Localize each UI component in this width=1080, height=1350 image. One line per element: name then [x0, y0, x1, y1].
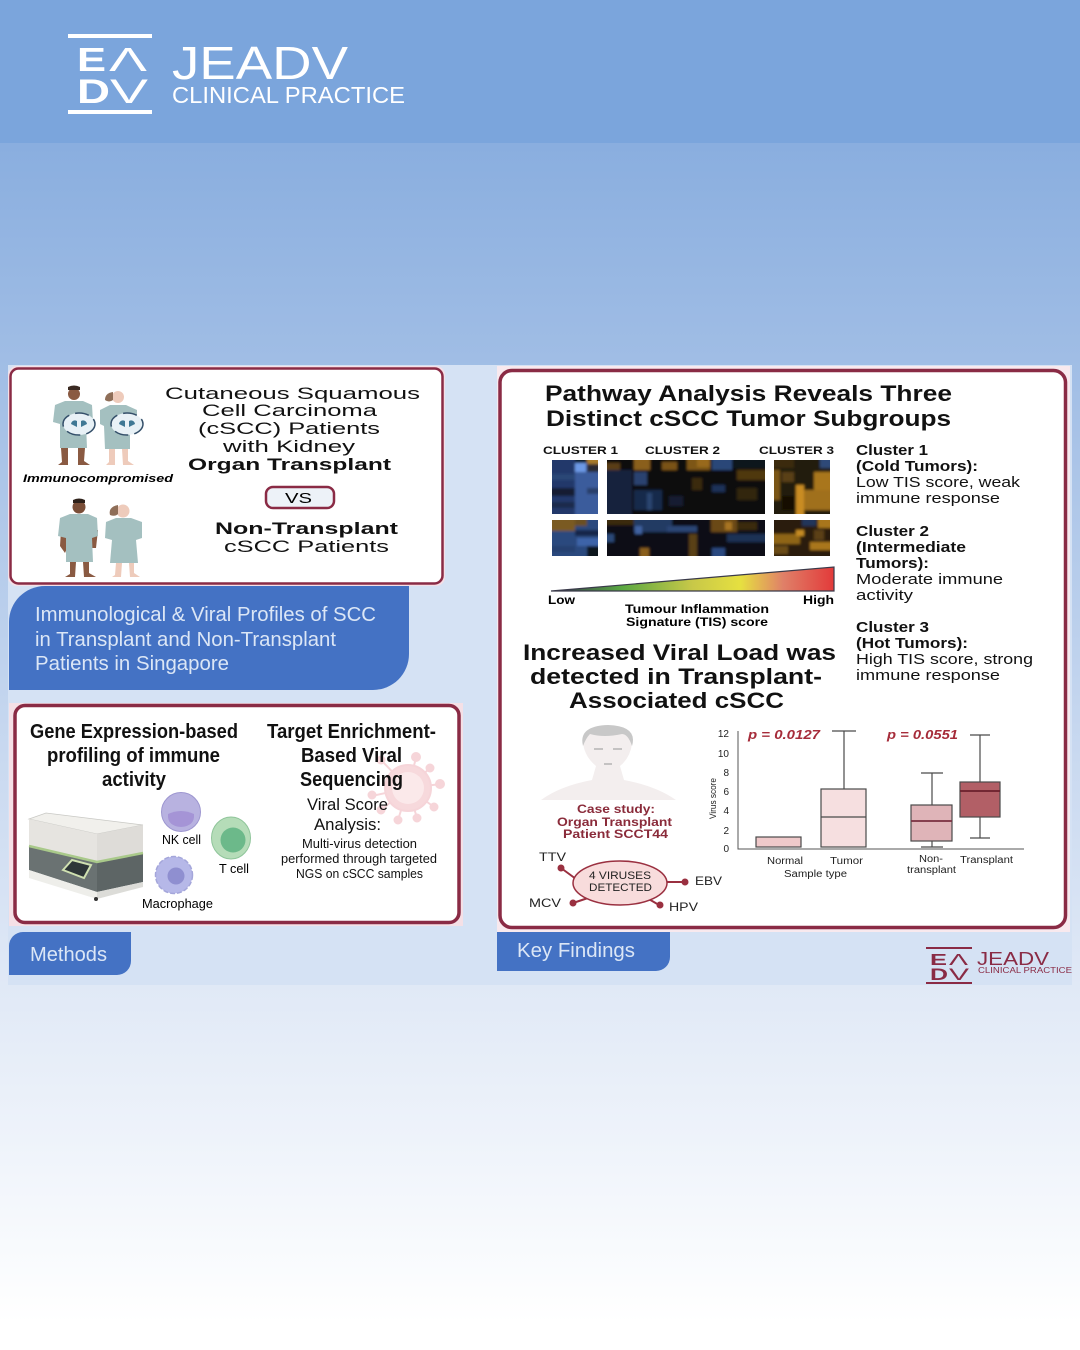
- logo: JEADV Clinical Practice: Λ: [109, 41, 147, 78]
- title banner: in Transplant and Non-Transplant: [35, 628, 336, 651]
- box plot: virus score: Tumor: [830, 856, 864, 867]
- heading: gene expression profiling: profiling of immune: [47, 745, 220, 767]
- icon: T cell: T cell: [219, 862, 249, 876]
- icon: sequencing machine: [29, 813, 143, 901]
- diagram: four viruses detected: TTV: [539, 850, 566, 864]
- icon: NK cell: [162, 792, 201, 847]
- text: cluster 2: Cluster 2: [856, 524, 929, 540]
- text: cluster 2: Tumors):: [856, 556, 929, 572]
- heading: viral sequencing: Sequencing: [300, 769, 403, 791]
- logo: JEADV Clinical Practice: CLINICAL PRACTICE: [172, 82, 405, 108]
- icon: non-transplant patients: [58, 498, 142, 577]
- text: viral score analysis: Viral Score: [307, 795, 388, 814]
- badge: vs: VS: [285, 490, 312, 507]
- text: non-transplant group: [215, 519, 398, 556]
- TIS gradient wedge: Tumour Inflammation: [625, 604, 769, 616]
- TIS gradient wedge: [548, 567, 834, 629]
- icon: macrophage: Macrophage: [142, 897, 213, 911]
- box plot: virus score: 8: [723, 768, 729, 779]
- box plot: virus score: [708, 728, 1024, 880]
- heatmap: [549, 457, 833, 559]
- TIS gradient wedge: Signature (TIS) score: [626, 617, 768, 629]
- box plot: virus score: Sample type: [784, 869, 847, 880]
- text: transplant group: Cell Carcinoma: [202, 401, 378, 420]
- logo: small JEADV: Λ: [949, 952, 969, 969]
- heatmap labels: CLUSTER 1: [543, 445, 618, 457]
- box plot: virus score: transplant: [907, 865, 956, 876]
- text: transplant group: Organ Transplant: [188, 455, 391, 474]
- logo: JEADV Clinical Practice: V: [110, 73, 149, 111]
- panel: methods: [9, 703, 463, 926]
- text: viral score analysis: Multi-virus detection: [302, 836, 417, 851]
- box plot: virus score: p = 0.0551: [886, 728, 958, 742]
- diagram: four viruses detected: HPV: [669, 900, 698, 914]
- text: viral score analysis: performed through targeted: [281, 851, 437, 866]
- heatmap labels: CLUSTER 3: [759, 445, 834, 457]
- logo: small JEADV: E: [930, 952, 948, 969]
- diagram: four viruses detected: DETECTED: [589, 882, 652, 894]
- diagram: four viruses detected: EBV: [695, 874, 722, 888]
- text: cluster 1: Cluster 1: [856, 443, 928, 459]
- heatmap labels: [543, 445, 834, 457]
- badge: vs: [266, 487, 334, 508]
- text: non-transplant group: Non-Transplant: [215, 519, 398, 538]
- logo: JEADV Clinical Practice: D: [77, 73, 110, 111]
- box plot: virus score: 10: [718, 749, 729, 760]
- diagram: four viruses detected: MCV: [529, 896, 561, 910]
- heading: pathway analysis: [545, 381, 952, 431]
- text: cluster 1: (Cold Tumors):: [856, 459, 978, 475]
- text: cluster 2: Moderate immune: [856, 572, 1003, 588]
- tab: methods: [9, 932, 131, 975]
- text: cluster 1: [856, 443, 1021, 507]
- text: transplant group: Cutaneous Squamous: [165, 384, 420, 403]
- heading: viral load: detected in Transplant-: [530, 664, 822, 689]
- title banner: Immunological & Viral Profiles of SCC: [35, 603, 376, 626]
- text: cluster 3: High TIS score, strong: [856, 652, 1033, 668]
- logo: JEADV Clinical Practice: [68, 34, 405, 114]
- text: case study: Case study:: [577, 804, 655, 816]
- heading: gene expression profiling: Gene Expression-based: [30, 721, 238, 743]
- text: cluster 2: (Intermediate: [856, 540, 966, 556]
- text: cluster 1: Low TIS score, weak: [856, 475, 1021, 491]
- label: immunocompromised: Immunocompromised: [23, 473, 173, 485]
- header band: [0, 0, 1080, 143]
- text: cluster 3: Cluster 3: [856, 620, 929, 636]
- text: viral score analysis: Analysis:: [314, 815, 381, 834]
- text: viral score analysis: [281, 795, 437, 881]
- TIS gradient wedge: Low: [548, 595, 575, 607]
- text: cluster 3: immune response: [856, 668, 1000, 684]
- box plot: virus score: Transplant: [960, 855, 1013, 866]
- logo: JEADV Clinical Practice: E: [77, 41, 106, 78]
- heading: pathway analysis: Distinct cSCC Tumor Subgroups: [546, 406, 951, 431]
- title banner: Patients in Singapore: [35, 652, 229, 675]
- diagram: four viruses detected: 4 VIRUSES: [589, 870, 651, 882]
- tab: methods: Methods: [30, 944, 107, 966]
- logo: small JEADV: CLINICAL PRACTICE: [978, 965, 1072, 975]
- panel: study population: [8, 366, 445, 586]
- panel: key findings: [497, 366, 1070, 932]
- icon: transplant patients: [53, 386, 143, 465]
- heading: viral sequencing: Target Enrichment-: [267, 721, 436, 743]
- box plot: virus score: Normal: [767, 856, 803, 867]
- icon: NK cell: NK cell: [162, 833, 201, 847]
- box plot: virus score: 4: [723, 806, 729, 817]
- box plot: virus score: 12: [718, 729, 729, 740]
- text: case study: [557, 804, 672, 841]
- inset content background: [8, 365, 1072, 985]
- heading: gene expression profiling: [30, 721, 238, 791]
- text: cluster 3: [856, 620, 1033, 684]
- logo: small JEADV: V: [949, 965, 970, 984]
- icon: T cell: [212, 817, 250, 876]
- box plot: virus score: 2: [723, 826, 729, 837]
- heading: viral load: [523, 640, 836, 713]
- heading: viral load: Associated cSCC: [569, 688, 784, 713]
- icon: macrophage: [142, 856, 213, 911]
- heading: gene expression profiling: activity: [102, 769, 167, 791]
- text: cluster 3: (Hot Tumors):: [856, 636, 968, 652]
- tab: key findings: Key Findings: [517, 940, 635, 962]
- text: non-transplant group: cSCC Patients: [224, 537, 389, 556]
- heading: viral load: Increased Viral Load was: [523, 640, 836, 665]
- box plot: virus score: Non-: [919, 854, 943, 865]
- box plot: virus score: 0: [723, 844, 729, 855]
- icon: patient portrait: [541, 725, 676, 800]
- text: case study: Patient SCCT44: [563, 829, 669, 841]
- text: cluster 2: activity: [856, 588, 914, 604]
- text: transplant group: [165, 384, 420, 474]
- text: transplant group: (cSCC) Patients: [198, 419, 380, 438]
- diagram: four viruses detected: [529, 850, 722, 914]
- logo: small JEADV: D: [930, 965, 948, 984]
- TIS gradient wedge: High: [803, 595, 834, 607]
- logo: small JEADV: [926, 947, 1072, 984]
- text: viral score analysis: NGS on cSCC samples: [296, 866, 423, 881]
- logo: JEADV Clinical Practice: JEADV: [172, 37, 348, 89]
- title banner: [9, 586, 409, 690]
- heading: viral sequencing: Based Viral: [301, 745, 402, 767]
- box plot: virus score: 6: [723, 787, 729, 798]
- text: cluster 1: immune response: [856, 491, 1000, 507]
- text: transplant group: with Kidney: [221, 437, 356, 456]
- heading: pathway analysis: Pathway Analysis Reveals Three: [545, 381, 952, 406]
- heatmap labels: CLUSTER 2: [645, 445, 720, 457]
- box plot: virus score: p = 0.0127: [747, 728, 821, 742]
- text: cluster 2: [856, 524, 1003, 604]
- text: case study: Organ Transplant: [557, 817, 672, 829]
- logo: small JEADV: JEADV: [977, 948, 1050, 969]
- box plot: virus score: Virus score: [708, 778, 718, 819]
- icon: virus: [368, 753, 444, 824]
- tab: key findings: [497, 932, 670, 971]
- heading: viral sequencing: [267, 721, 436, 791]
